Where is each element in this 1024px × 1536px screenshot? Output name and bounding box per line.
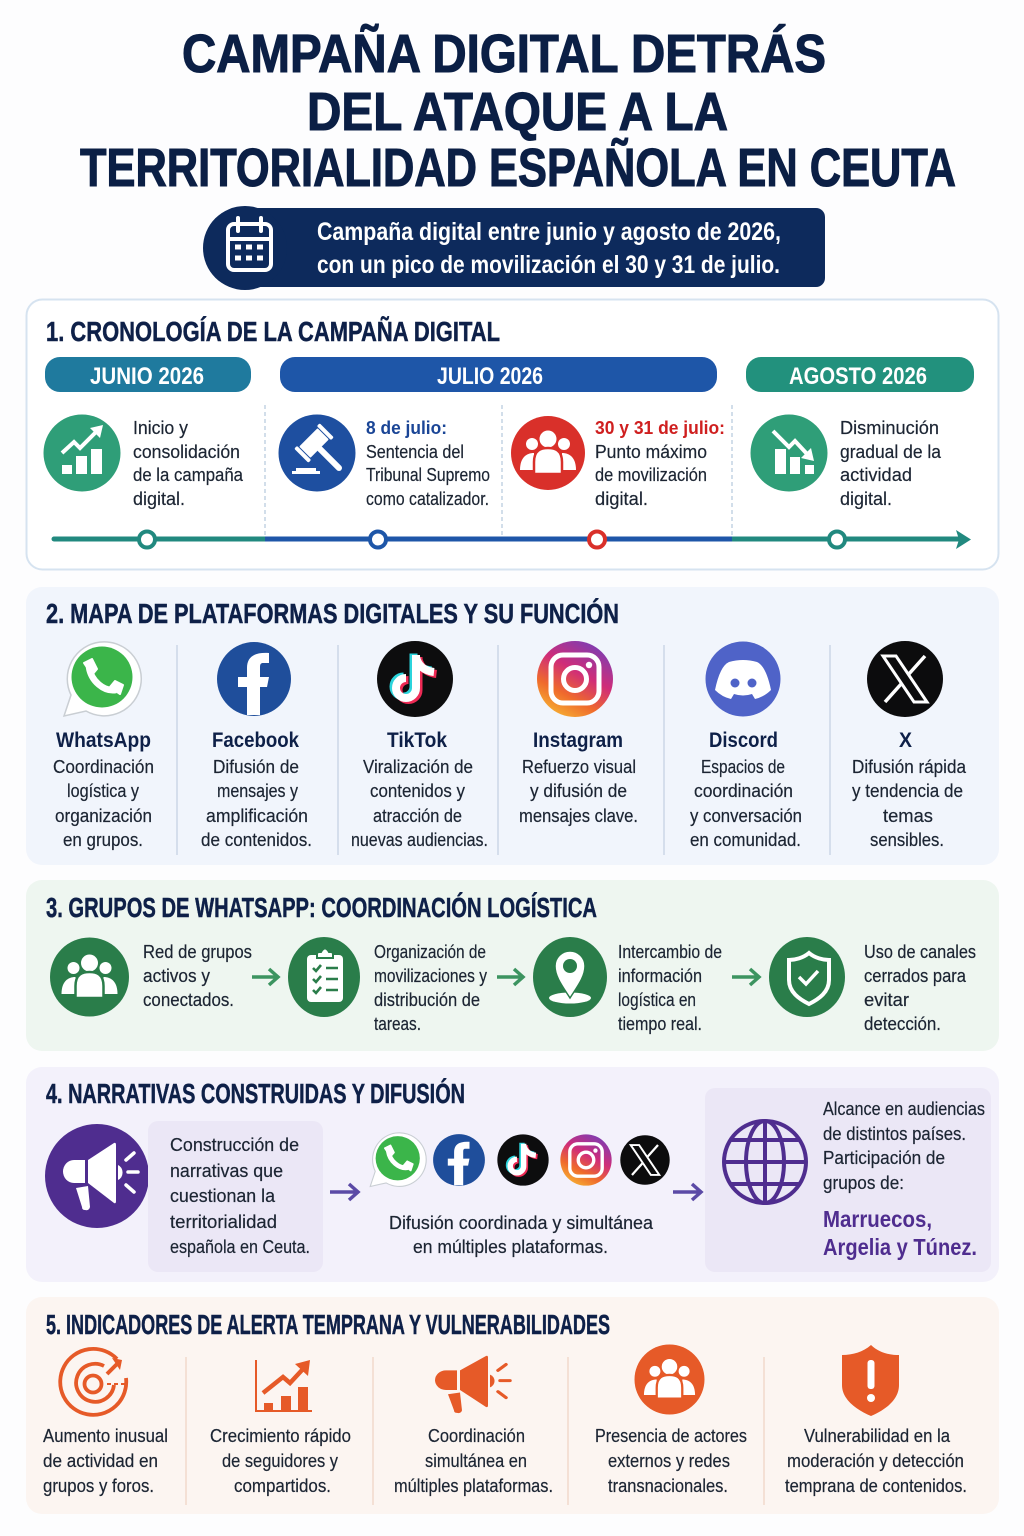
icon: globe [724,1121,806,1203]
text: difusión coordinada [389,1213,654,1257]
pill: junio [45,357,251,392]
text: intercambio: logística en [618,990,696,1010]
text: canales cerrados: Uso de canales [864,942,976,962]
text: disminución: digital. [840,489,892,509]
text box: construcción de narrativas: Construcción de [170,1135,299,1155]
text: inicio [133,418,244,509]
box: alcance [705,1088,991,1272]
heading: indicadores: 5. INDICADORES DE ALERTA TEMPRANA Y VULNERABILIDADES [46,1309,610,1340]
text: canales cerrados: evitar [864,990,909,1010]
text: 8 de julio: Tribunal Supremo [366,465,490,485]
heading: grupos: 3. GRUPOS DE WHATSAPP: COORDINACIÓN LOGÍSTICA [46,892,597,923]
platform: Discord: y conversación [690,806,802,826]
platform: X: temas [883,806,933,826]
icon: growth chart [44,414,120,492]
date banner [203,206,825,290]
platform: Instagram [519,641,638,826]
platform: WhatsApp [53,642,154,850]
text box: construcción de narrativas: territorialidad [170,1212,277,1232]
platform: WhatsApp: logística y [67,781,139,801]
platform: Instagram: Refuerzo visual [522,757,636,777]
text: organización: distribución de [374,990,480,1010]
platform: X: X [899,729,912,752]
text: canales cerrados [864,942,976,1034]
platform: Facebook: mensajes y [217,781,298,801]
indicator: crecimiento: Crecimiento rápido [210,1426,351,1446]
platform: WhatsApp: en grupos. [63,830,143,850]
date banner: Campaña digital entre junio y agosto de 2026, [317,218,781,246]
text: disminución [840,418,942,509]
platform: Facebook: amplificación [206,806,308,826]
panel: plataformas [26,587,999,865]
indicator: coordinación simultánea: simultánea en [425,1451,527,1471]
platform: Facebook: Facebook [212,729,299,752]
text: intercambio: Intercambio de [618,942,722,962]
platform: Discord: Discord [709,729,778,752]
indicator: actividad inusual: grupos y foros. [43,1476,154,1496]
text box: construcción de narrativas: cuestionan la [170,1186,276,1206]
platform: Facebook: de contenidos. [201,830,312,850]
text: canales cerrados: cerrados para [864,966,967,986]
box: alcance: Participación de [823,1148,945,1168]
text: inicio: Inicio y [133,418,188,438]
panel: narrativas [26,1067,999,1282]
icon: crowd [511,416,585,490]
text: organización: tareas. [374,1014,421,1034]
platform: Instagram: y difusión de [530,781,627,801]
platform: Discord: en comunidad. [690,830,801,850]
indicator: coordinación simultánea [394,1356,553,1496]
platform: Facebook: Difusión de [213,757,299,777]
text: inicio: digital. [133,489,185,509]
arrow [497,969,523,985]
text: organización: movilizaciones y [374,966,487,986]
arrow [330,1184,358,1200]
text box: construcción de narrativas: española en Ceuta. [170,1237,310,1257]
indicator: actividad inusual: Aumento inusual [43,1426,168,1446]
indicator: coordinación simultánea: múltiples plataformas. [394,1476,553,1496]
arrow [252,969,278,985]
box: alcance: grupos de: [823,1173,904,1193]
text: red de grupos [143,942,252,1010]
platform: TikTok: Viralización de [363,757,473,777]
text: inicio: de la campaña [133,465,244,485]
text: disminución: actividad [840,465,912,485]
icon: group [50,938,129,1016]
platform: X: y tendencia de [852,781,963,801]
text: difusión coordinada: en múltiples plataformas. [413,1237,608,1257]
text: red de grupos: Red de grupos [143,942,252,962]
panel: grupos de WhatsApp [26,880,999,1051]
pill: julio [280,357,717,392]
platform: Instagram: mensajes clave. [519,806,638,826]
text: inicio: consolidación [133,442,240,462]
pill: agosto [746,357,974,392]
platform: TikTok: atracción de [373,806,462,826]
platform: TikTok: nuevas audiencias. [351,830,488,850]
platform: Discord: Espacios de [701,757,785,777]
text: 30 y 31 de julio [595,417,725,509]
platform: WhatsApp: organización [55,806,152,826]
timeline arrow [54,530,971,549]
text: red de grupos: conectados. [143,990,234,1010]
platform: X: sensibles. [870,830,944,850]
text: difusión coordinada: Difusión coordinada y simultánea [389,1213,654,1233]
date banner: con un pico de movilización el 30 y 31 de julio. [317,251,780,279]
icon: megaphone [45,1124,149,1228]
panel: indicadores [26,1297,999,1514]
platform: Instagram: Instagram [533,729,623,752]
platform: TikTok: contenidos y [370,781,465,801]
icon: decline chart [750,414,828,492]
text box: construcción de narrativas [148,1121,323,1272]
text: 30 y 31 de julio: de movilización [595,465,707,485]
box: alcance: Alcance en audiencias [823,1099,985,1119]
box: alcance: Argelia y Túnez. [823,1234,977,1260]
indicator: vulnerabilidad: moderación y detección [787,1451,964,1471]
title: CAMPAÑA DIGITAL DETRÁS [182,24,826,84]
platform: TikTok: TikTok [387,729,447,752]
indicator: vulnerabilidad: temprana de contenidos. [785,1476,967,1496]
text: 8 de julio: Sentencia del [366,442,464,462]
platform: WhatsApp: WhatsApp [56,729,151,752]
text: 30 y 31 de julio: 30 y 31 de julio: [595,417,725,438]
panel: cronología [26,300,998,570]
indicator: actores externos: Presencia de actores [595,1426,747,1446]
icon: calendar [228,218,271,270]
platform: Discord [690,642,802,850]
heading: narrativas: 4. NARRATIVAS CONSTRUIDAS Y DIFUSIÓN [46,1078,465,1109]
pill: agosto: AGOSTO 2026 [789,363,927,390]
title [80,24,956,198]
indicator: actores externos [595,1344,747,1496]
indicator: coordinación simultánea: Coordinación [428,1426,525,1446]
text: 8 de julio [366,417,490,509]
heading: plataformas: 2. MAPA DE PLATAFORMAS DIGITALES Y SU FUNCIÓN [46,598,619,629]
text: intercambio: información [618,966,702,986]
icon: clipboard [288,937,360,1017]
icon: shield check [769,937,845,1017]
text: organización [374,942,487,1034]
text box: construcción de narrativas: narrativas que [170,1161,283,1181]
pill: julio: JULIO 2026 [437,363,543,390]
indicator: crecimiento: de seguidores y [222,1451,338,1471]
platform: TikTok [351,641,488,850]
arrow [673,1184,701,1200]
indicator: actividad inusual: de actividad en [43,1451,158,1471]
pill: junio: JUNIO 2026 [90,363,204,390]
box: alcance: Marruecos, [823,1206,932,1232]
indicator: crecimiento [210,1360,351,1496]
text: disminución: Disminución [840,418,939,438]
indicator: vulnerabilidad: Vulnerabilidad en la [804,1426,951,1446]
text: intercambio: tiempo real. [618,1014,702,1034]
platform: Facebook [201,642,312,850]
text: intercambio [618,942,722,1034]
platform: WhatsApp: Coordinación [53,757,154,777]
text: 8 de julio: 8 de julio: [366,417,447,438]
icons: platforms row [370,1133,670,1187]
icon: location pin [533,937,607,1017]
text: disminución: gradual de la [840,442,942,462]
text: 30 y 31 de julio: digital. [595,489,648,509]
text: canales cerrados: detección. [864,1014,941,1034]
platform: X [852,641,967,850]
indicator: actores externos: externos y redes [608,1451,730,1471]
title: DEL ATAQUE A LA [307,82,728,142]
indicator: actividad inusual [43,1349,168,1496]
platform: Discord: coordinación [694,781,793,801]
arrow [732,969,759,985]
text: red de grupos: activos y [143,966,210,986]
indicator: vulnerabilidad [785,1345,967,1496]
text: 8 de julio: como catalizador. [366,489,489,509]
heading: cronología: 1. CRONOLOGÍA DE LA CAMPAÑA DIGITAL [46,316,500,347]
text: 30 y 31 de julio: Punto máximo [595,442,707,462]
box: alcance: de distintos países. [823,1124,966,1144]
platform: X: Difusión rápida [852,757,967,777]
indicator: actores externos: transnacionales. [608,1476,728,1496]
text: organización: Organización de [374,942,486,962]
indicator: crecimiento: compartidos. [234,1476,331,1496]
icon: gavel [278,414,356,492]
